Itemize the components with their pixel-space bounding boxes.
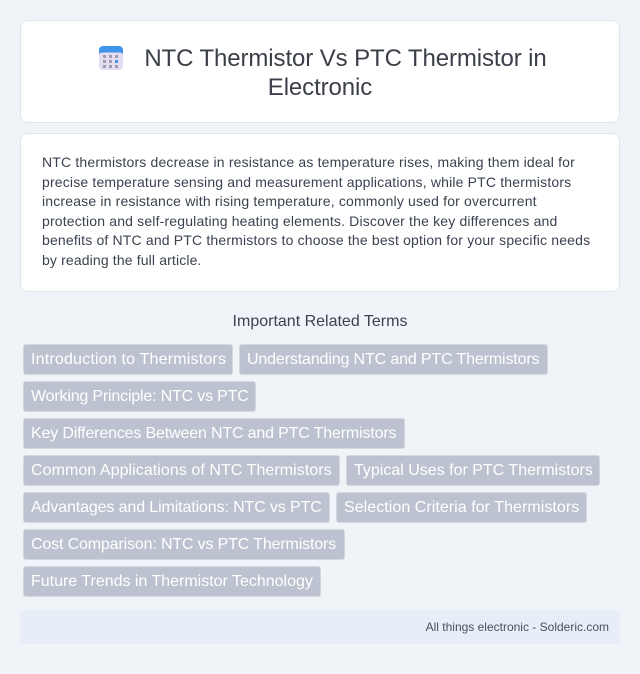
chip: Typical Uses for PTC Thermistors	[354, 462, 593, 479]
title: Electronic	[268, 74, 372, 101]
footer credit: All things electronic - Solderic.com	[426, 620, 609, 634]
chip	[336, 492, 587, 523]
chip: Working Principle: NTC vs PTC	[31, 388, 249, 405]
chip	[23, 566, 321, 597]
chip: Introduction to Thermistors	[31, 351, 226, 368]
heading: important related terms: Important Related Terms	[233, 313, 407, 330]
chip	[23, 455, 340, 486]
icon: calendar	[99, 46, 123, 70]
text block: introduction: increase in resistance with rising temperature, commonly used for overcurrent	[42, 193, 537, 209]
text block: introduction: NTC thermistors decrease in resistance as temperature rises, making them ideal for	[42, 154, 575, 170]
chip	[346, 455, 600, 486]
chip: Advantages and Limitations: NTC vs PTC	[31, 499, 322, 516]
panel: title header	[20, 20, 620, 123]
chip: Cost Comparison: NTC vs PTC Thermistors	[31, 536, 336, 553]
chip list: related terms	[23, 344, 600, 597]
text block: introduction: by reading the full article.	[42, 252, 202, 268]
chip: Understanding NTC and PTC Thermistors	[247, 351, 539, 368]
text block: introduction: precise temperature sensing and measurement applications, while PTC thermistors	[42, 174, 571, 190]
chip	[23, 492, 330, 523]
text block: introduction: benefits of NTC and PTC thermistors to choose the best option for your specific needs	[42, 232, 590, 248]
chip	[23, 344, 233, 375]
text block: introduction: protection and self-regulating heating elements. Discover the key differences and	[42, 213, 557, 229]
chip	[23, 381, 256, 412]
title: NTC Thermistor Vs PTC Thermistor in	[144, 45, 547, 72]
chip	[23, 418, 405, 449]
chip	[239, 344, 548, 375]
chip: Common Applications of NTC Thermistors	[31, 462, 332, 479]
chip: Selection Criteria for Thermistors	[344, 499, 579, 516]
panel: introduction text	[20, 133, 620, 292]
text block: introduction	[42, 154, 590, 268]
footer	[20, 610, 620, 644]
chip: Key Differences Between NTC and PTC Thermistors	[31, 425, 396, 442]
chip: Future Trends in Thermistor Technology	[31, 573, 313, 590]
title	[144, 45, 547, 101]
chip	[23, 529, 345, 560]
